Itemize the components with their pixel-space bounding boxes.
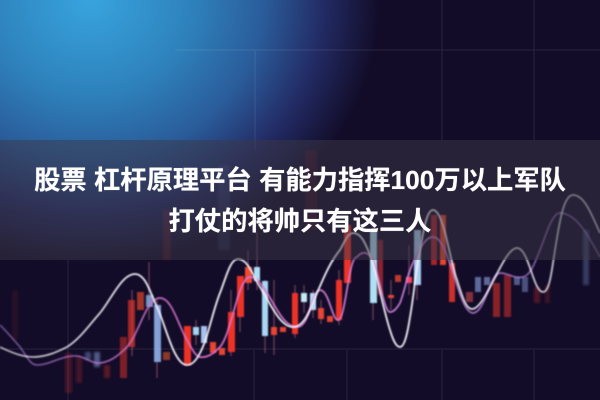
white moving-average line xyxy=(0,195,600,365)
purple moving-average line xyxy=(0,213,600,365)
dim candlesticks left and right xyxy=(12,150,589,393)
candlesticks xyxy=(120,215,528,378)
title xyxy=(34,165,566,236)
title: 股票 杠杆原理平台 有能力指挥100万以上军队 xyxy=(34,165,566,195)
title band xyxy=(0,140,600,260)
title: 打仗的将帅只有这三人 xyxy=(169,206,431,236)
